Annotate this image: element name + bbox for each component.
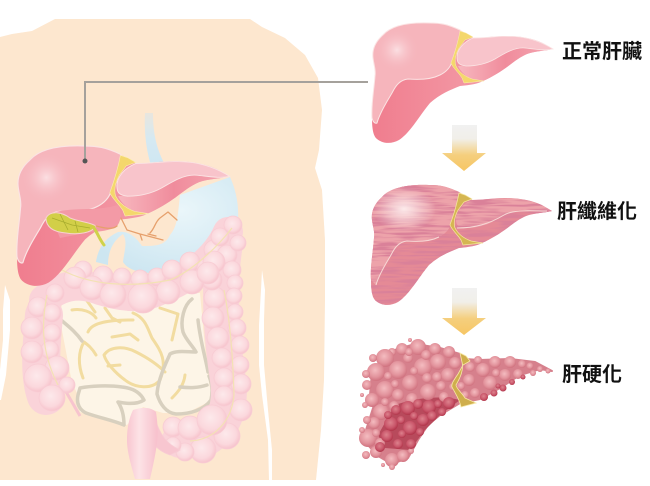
label: cirrhosis: 肝硬化 bbox=[562, 363, 622, 386]
hepatic vessels bbox=[96, 212, 177, 240]
appendix bbox=[65, 390, 80, 416]
arrow 1 bbox=[442, 125, 486, 171]
fibrosis highlight bbox=[372, 187, 436, 231]
colon bbox=[21, 216, 252, 463]
arrow 2 bbox=[442, 288, 486, 335]
stomach bbox=[96, 177, 238, 273]
sigmoid junction bbox=[147, 412, 180, 455]
nodules: upper lobe bbox=[359, 338, 461, 470]
intestine folds: yellow bbox=[65, 292, 185, 398]
dark underside bbox=[378, 398, 460, 450]
nodules: left lobe bbox=[457, 356, 550, 399]
label: fibrosis: 肝纖維化 bbox=[557, 200, 637, 223]
rectum bbox=[127, 408, 158, 479]
small intestine bbox=[60, 292, 212, 425]
body liver bbox=[17, 146, 230, 286]
body silhouette bbox=[0, 19, 325, 480]
quadrate lobe bbox=[50, 205, 121, 238]
fibrotic hilum bbox=[450, 193, 483, 245]
fibrosis streaks bbox=[369, 182, 554, 308]
body arm gaps bbox=[0, 270, 272, 480]
normal liver bbox=[372, 23, 553, 143]
colon base band bbox=[41, 232, 229, 440]
intestine folds: grey bbox=[61, 299, 212, 425]
fibrotic liver bbox=[369, 182, 554, 308]
label: normal liver: 正常肝臟 bbox=[562, 40, 642, 63]
cirrhotic hilum bbox=[452, 353, 476, 407]
esophagus bbox=[145, 113, 164, 165]
gallbladder bbox=[46, 213, 104, 245]
nodules: lower dark area bbox=[375, 397, 455, 452]
cirrhotic liver bbox=[359, 338, 552, 470]
callout line bbox=[82, 82, 368, 164]
colon band lines bbox=[44, 228, 234, 441]
